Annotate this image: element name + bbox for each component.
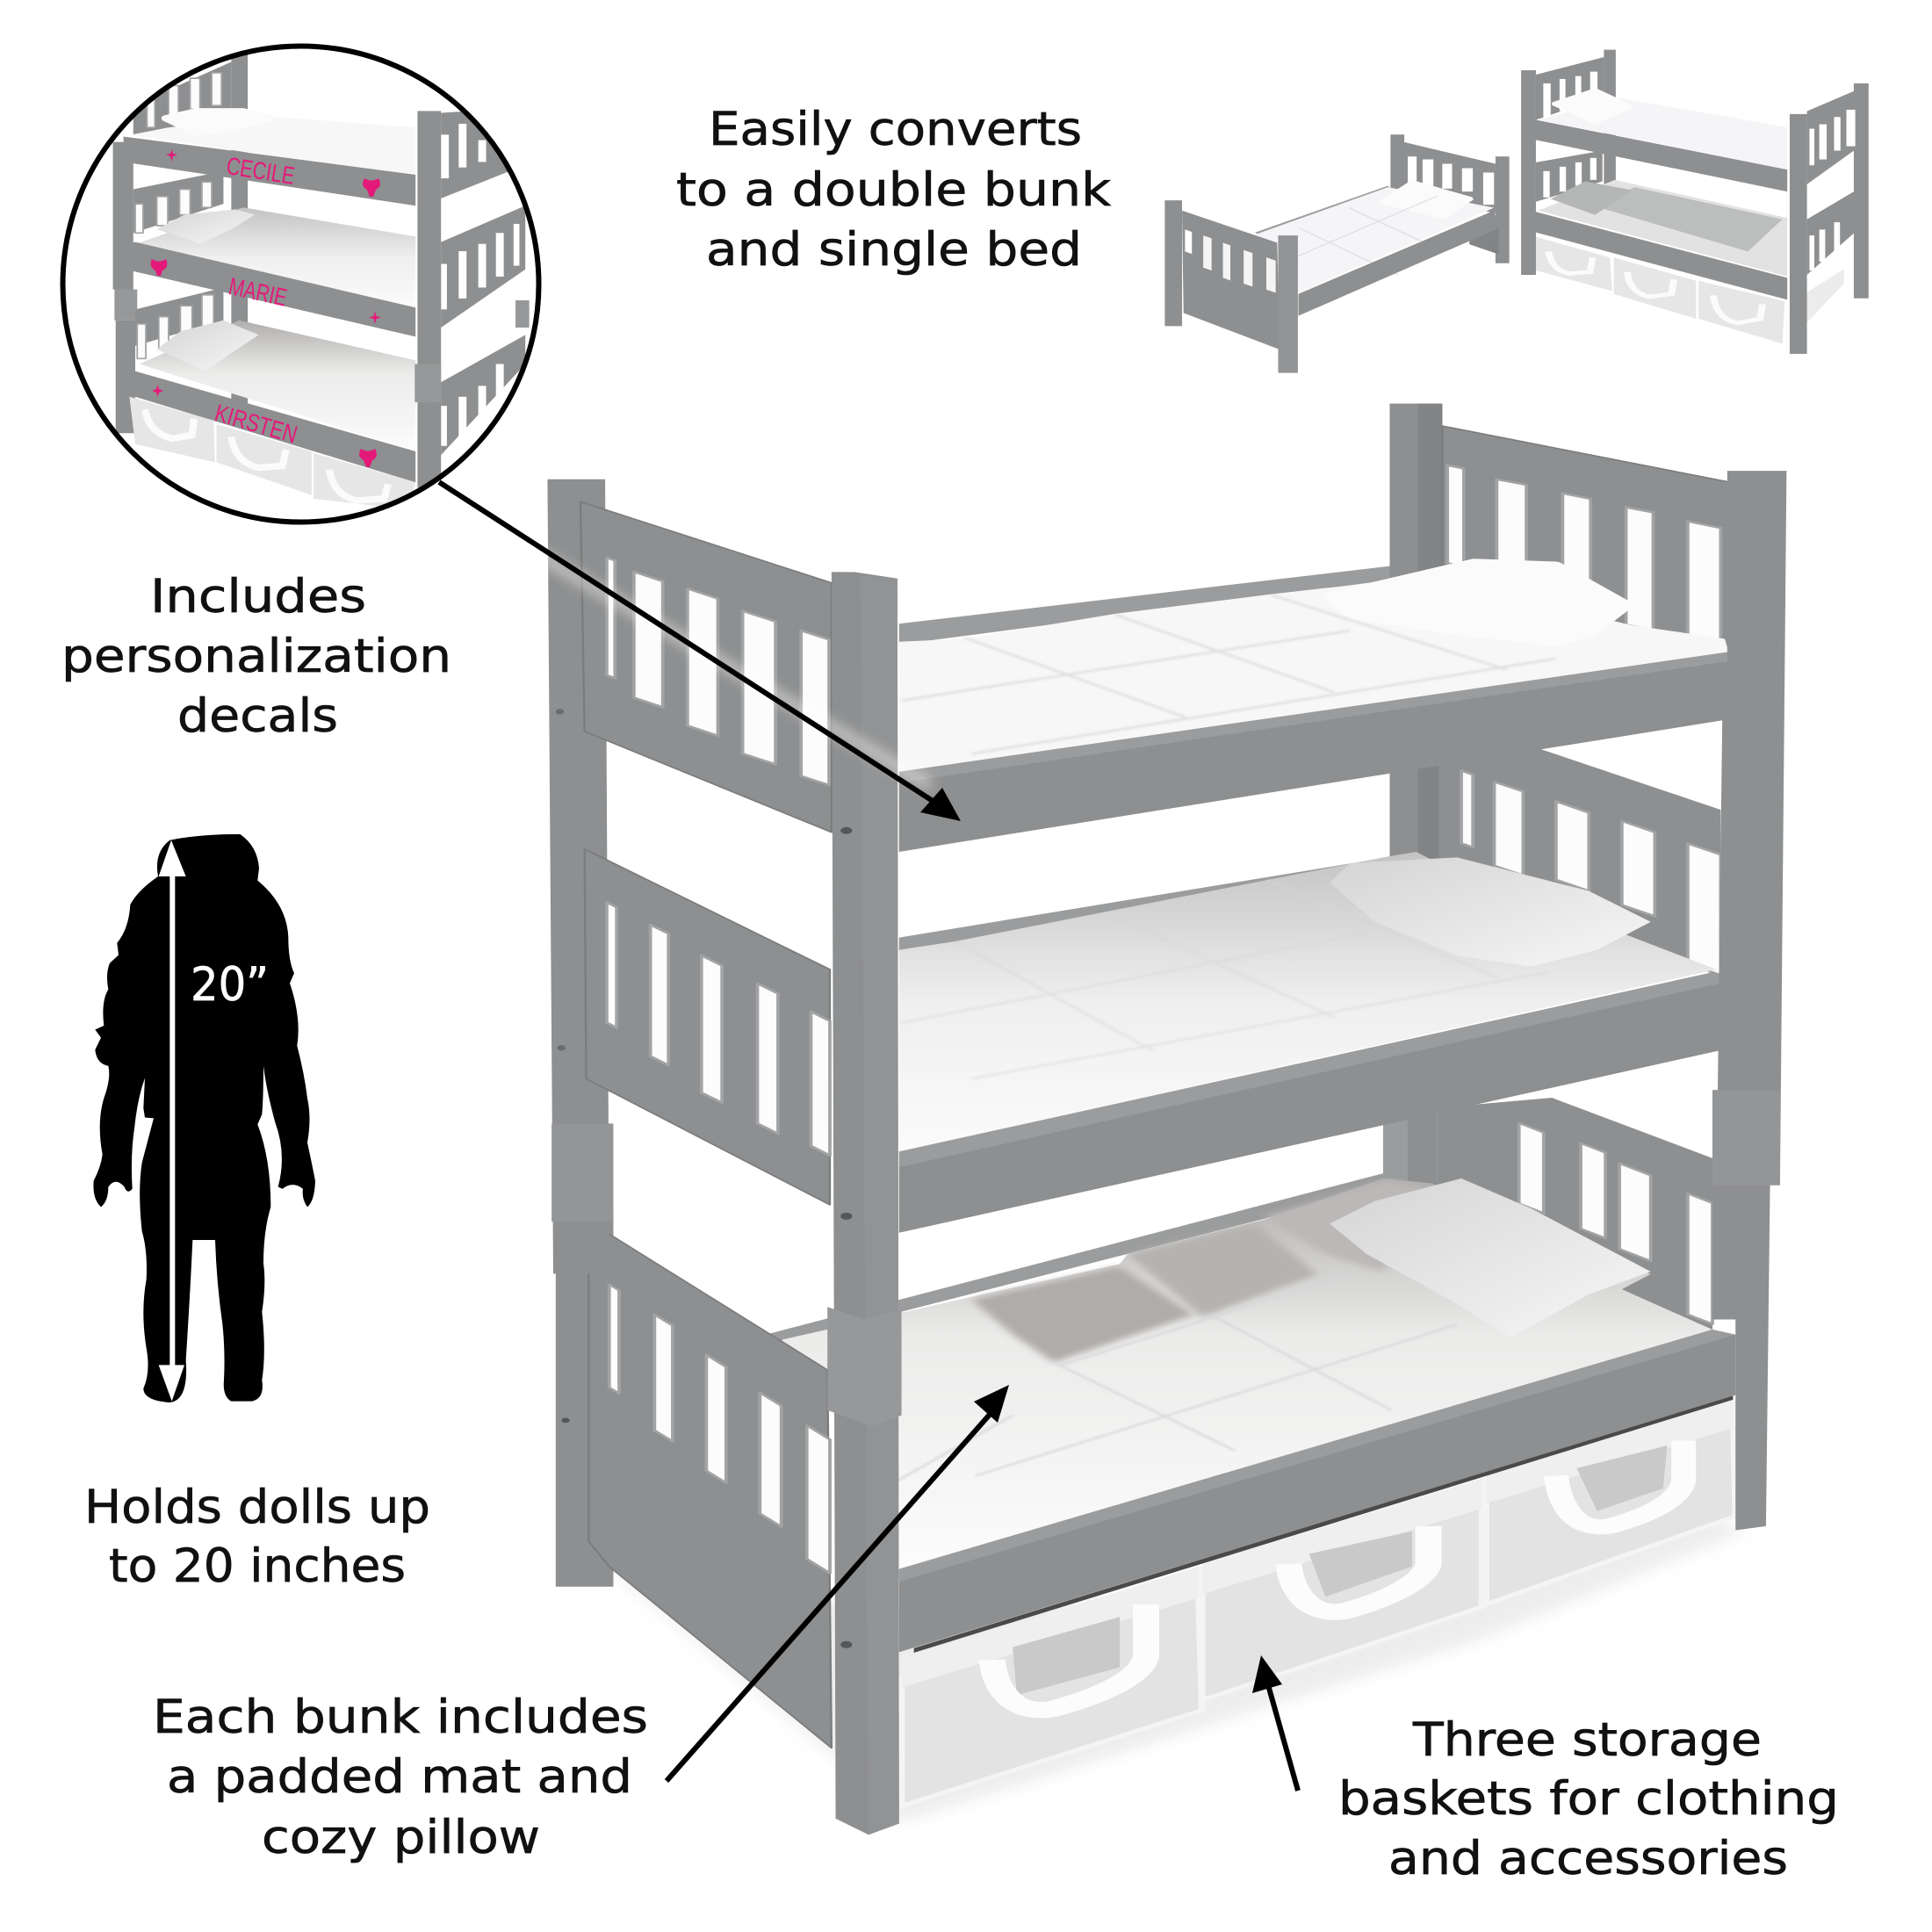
text: storage baskets: Three storage	[1412, 1713, 1762, 1767]
middle mattress	[899, 852, 1717, 1151]
text: padded mat and pillow: a padded mat and	[167, 1750, 632, 1804]
decal name: Marie: MARIE	[227, 272, 290, 312]
top back rail	[899, 566, 1390, 645]
top left panel	[580, 501, 832, 833]
text: personalization decals: Includes	[150, 570, 366, 624]
bottom long rail	[899, 1330, 1735, 1652]
front right post	[1717, 471, 1786, 1186]
inset product: single bed and double bunk	[1164, 50, 1869, 373]
rear head post	[1390, 404, 1443, 861]
top quilting	[902, 595, 1556, 753]
rear left post lower	[556, 1214, 613, 1587]
arrow from inset to top bunk rail	[439, 482, 961, 821]
top mattress	[899, 577, 1729, 772]
text: converts to double bunk and single bed: and single bed	[706, 223, 1082, 277]
bottom pillow	[1330, 1179, 1651, 1337]
decal name: Cecile: CECILE	[225, 152, 297, 190]
text: converts to double bunk and single bed: Easily converts	[709, 103, 1082, 156]
text: padded mat and pillow: Each bunk includes	[153, 1690, 648, 1744]
middle head panel	[1439, 748, 1720, 972]
left rear post	[547, 479, 609, 1273]
left post bolt holes	[556, 709, 566, 1050]
inset bed drawing	[113, 54, 530, 509]
bottom mattress	[782, 1179, 1712, 1572]
basket 3	[1486, 1400, 1735, 1604]
top pillow	[1330, 563, 1626, 642]
front post main shaft	[561, 572, 902, 1835]
arrow to padded mat	[667, 1385, 1009, 1781]
text: storage baskets	[1338, 1713, 1839, 1885]
middle back rail	[899, 857, 1390, 951]
decal name: Kirsten: KIRSTEN	[212, 399, 300, 449]
text: doll size	[84, 1481, 430, 1593]
text: personalization decals: decals	[177, 689, 338, 743]
double bunk	[1521, 50, 1869, 354]
right post foot	[1712, 1181, 1770, 1530]
middle left panel	[585, 849, 830, 1205]
middle long rail	[899, 978, 1744, 1233]
floor shadow	[609, 1501, 1746, 1824]
inset circle: personalization decals	[63, 46, 539, 522]
gap shadows above baskets	[914, 1395, 1733, 1653]
height label: 20”	[191, 958, 269, 1012]
comforter shaded folds	[898, 1181, 1457, 1481]
connector left	[551, 1123, 613, 1222]
bottom tier, back and baskets	[556, 1098, 1770, 1806]
text: converts to double bunk and single bed: to a double bunk	[676, 163, 1111, 217]
text: doll size: to 20 inches	[109, 1539, 406, 1593]
single bed	[1164, 134, 1510, 373]
pink decal icons	[151, 149, 381, 467]
middle pillow	[1330, 857, 1651, 967]
text: converts to double bunk and single bed	[676, 103, 1111, 277]
text: storage baskets: and accessories	[1388, 1832, 1788, 1885]
back rail	[766, 1173, 1383, 1342]
bottom left panel	[588, 1222, 832, 1748]
text: personalization decals	[61, 570, 451, 743]
inset circle outline	[63, 46, 539, 522]
top head panel	[1443, 426, 1729, 659]
text: padded mat and pillow: cozy pillow	[262, 1811, 540, 1864]
text: personalization decals: personalization	[61, 630, 451, 683]
decorative halo behind arrow one	[492, 527, 931, 786]
middle quilting	[902, 880, 1548, 1078]
top long rail	[899, 658, 1752, 852]
text: storage baskets: baskets for clothing	[1338, 1772, 1839, 1826]
top and middle tiers	[547, 404, 1786, 1273]
arrow to storage basket	[1252, 1655, 1298, 1791]
main product photo: three tier bunk bed	[492, 404, 1786, 1835]
icon: doll silhouette with height arrow	[93, 834, 315, 1402]
basket 2	[1202, 1478, 1482, 1700]
text: padded mat and pillow	[153, 1690, 648, 1864]
basket 1	[902, 1567, 1202, 1806]
connector right	[1712, 1090, 1780, 1186]
text: doll size: Holds dolls up	[84, 1481, 430, 1534]
